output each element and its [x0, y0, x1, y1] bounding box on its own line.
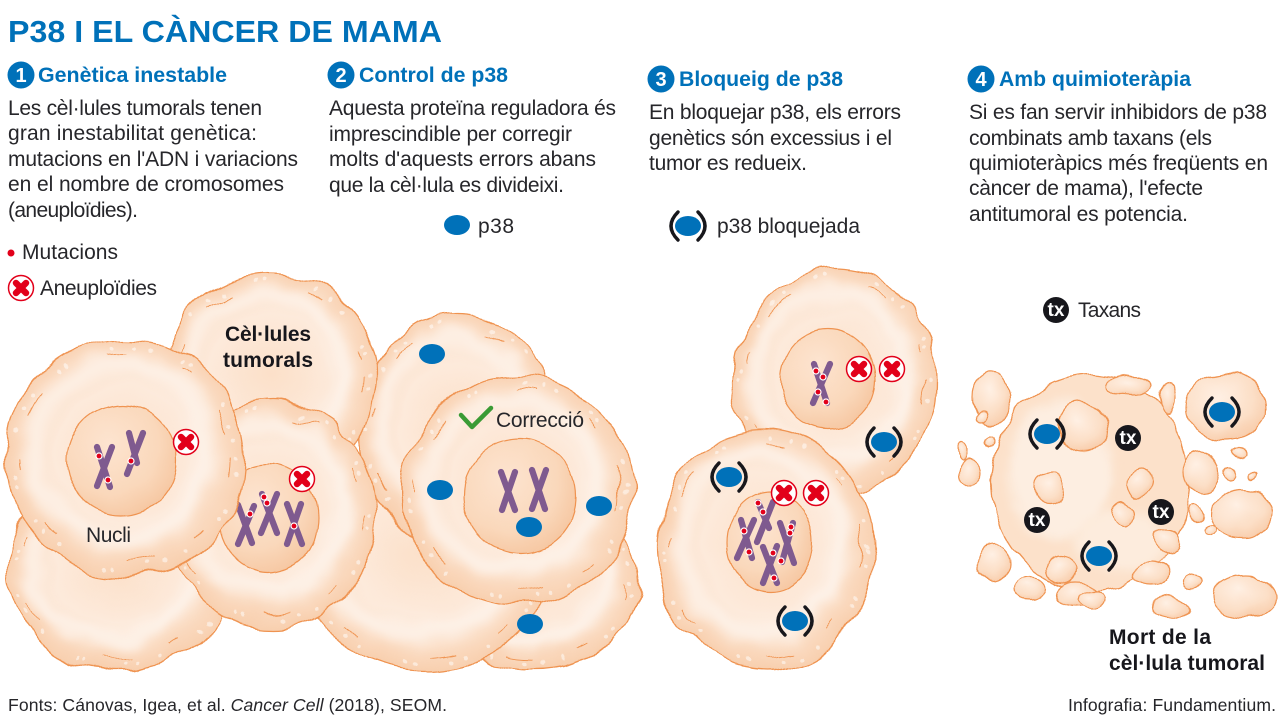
step 3 body text: genètics són excessius i el: [649, 127, 892, 150]
legend: p38: p38: [478, 215, 514, 238]
cell: upper left background: [163, 273, 377, 483]
p38 proteins: [419, 344, 612, 634]
step 1 body text: [8, 97, 298, 222]
taxan molecules: tx: [1029, 510, 1046, 531]
cell: lower left background: [8, 468, 228, 672]
step 2 body text: imprescindible per corregir: [329, 123, 572, 146]
legend: p38: [444, 215, 514, 238]
blocked p38 proteins: [1030, 398, 1239, 570]
step 4 body text: antitumoral es potencia.: [969, 203, 1188, 226]
footer: sources: Fonts: Cánovas, Igea, et al. Cancer Cell (2018), SEOM.: [8, 695, 447, 715]
step 3 body text: [649, 101, 901, 175]
step 4 body text: quimioteràpics més freqüents en: [969, 152, 1268, 175]
taxan molecules: [1024, 425, 1174, 533]
label: cèl·lules tumorals: tumorals: [223, 349, 313, 372]
cell: middle front with nucleus: [167, 402, 377, 628]
aneuploidy marks: [772, 356, 904, 506]
taxan molecules: tx: [1153, 502, 1170, 523]
title: P38 I EL CÀNCER DE MAMA: [8, 14, 442, 49]
step 1 heading: Genètica inestable: [38, 64, 227, 87]
step 3 heading: 3: [655, 69, 667, 91]
chromosomes with mutations: [238, 494, 302, 544]
step 2 body text: Aquesta proteïna reguladora és: [329, 97, 616, 120]
cell: correction cell with nucleus: [401, 377, 633, 605]
step 4 body text: Si es fan servir inhibidors de p38: [969, 101, 1267, 124]
legend: taxans: [1043, 297, 1141, 323]
legend: taxans: Taxans: [1078, 299, 1141, 322]
fragment cell with blocked p38: [1187, 373, 1265, 441]
illustration: dying tumour cell, step 4: [957, 372, 1276, 618]
cell: upper: [733, 269, 937, 495]
step 4 heading: Amb quimioteràpia: [999, 68, 1191, 91]
step 4 body text: [969, 101, 1268, 226]
step 4 heading: 4: [975, 69, 987, 91]
panel: bloqueig de p38 text: [648, 66, 901, 175]
legend item: aneuploïdies: Aneuploïdies: [40, 277, 157, 300]
cell: upper right background: [360, 314, 556, 550]
taxan molecules: tx: [1120, 428, 1137, 449]
step 3 heading: Bloqueig de p38: [679, 68, 843, 91]
label: mort de la cèl·lula tumoral: Mort de la: [1109, 626, 1211, 649]
label: cèl·lules tumorals: Cèl·lules: [225, 323, 311, 346]
step 3 body text: En bloquejar p38, els errors: [649, 101, 901, 124]
label: nucli: Nucli: [86, 524, 131, 547]
legend: p38 bloquejada: p38 bloquejada: [717, 215, 860, 238]
step 2 body text: [329, 97, 616, 197]
illustration: tumour cell cluster, steps 1 and 2: [6, 273, 640, 672]
step 1 heading: 1: [15, 65, 27, 87]
step 2 heading: [328, 62, 508, 88]
step 2 heading: Control de p38: [359, 64, 508, 87]
icon: aneuploidy mark, middle cell: [290, 466, 314, 492]
legend: taxans: tx: [1048, 300, 1065, 321]
panel: control de p38 text: [328, 62, 616, 197]
legend item: mutacions: Mutacions: [22, 241, 118, 264]
step 1 body text: mutacions en l'ADN i variacions: [8, 148, 298, 171]
panel: amb quimioteràpia text: [968, 66, 1268, 226]
label: mort de la cèl·lula tumoral: [1109, 626, 1265, 675]
cell: lower centre background: [298, 446, 552, 670]
cell: left front with nucleus: [6, 338, 244, 578]
step 4 body text: càncer de mama), l'efecte: [969, 177, 1203, 200]
label: mort de la cèl·lula tumoral: cèl·lula tumoral: [1109, 652, 1265, 675]
main dying cell: [992, 374, 1190, 590]
step 1 body text: Les cèl·lules tumorals tenen: [8, 97, 262, 120]
icon: green check: [461, 408, 491, 427]
cell: lower right background: [426, 496, 640, 668]
chromosomes without mutations: [501, 470, 546, 510]
step 2 body text: que la cèl·lula es divideixi.: [329, 174, 564, 197]
legend: mutations and aneuploidies: [8, 241, 157, 300]
chromosome with mutations: [813, 364, 830, 405]
blocked p38 proteins: [712, 428, 901, 635]
step 2 heading: 2: [335, 65, 347, 87]
step 1 body text: (aneuploïdies).: [8, 199, 138, 222]
chromosomes with mutations: [737, 500, 794, 583]
cell fragments: [957, 372, 1276, 618]
label: correcció: Correcció: [496, 409, 584, 432]
chromosomes with mutations: [96, 433, 143, 487]
illustration: cells with blocked p38, step 3: [657, 269, 937, 671]
step 1 body text: gran inestabilitat genètica:: [8, 122, 257, 145]
label: cèl·lules tumorals: [223, 323, 313, 372]
step 4 body text: combinats amb taxans (els: [969, 127, 1212, 150]
legend: p38 bloquejada: [671, 212, 860, 240]
footer: credit: Infografia: Fundamentium.: [1068, 695, 1276, 715]
step 1 body text: en el nombre de cromosomes: [8, 173, 284, 196]
step 2 body text: molts d'aquests errors abans: [329, 148, 596, 171]
panel: genètica inestable text: [8, 62, 298, 222]
step 3 body text: tumor es redueix.: [649, 152, 807, 175]
cell: lower: [657, 429, 873, 671]
icon: aneuploidy mark, left cell: [174, 430, 198, 454]
